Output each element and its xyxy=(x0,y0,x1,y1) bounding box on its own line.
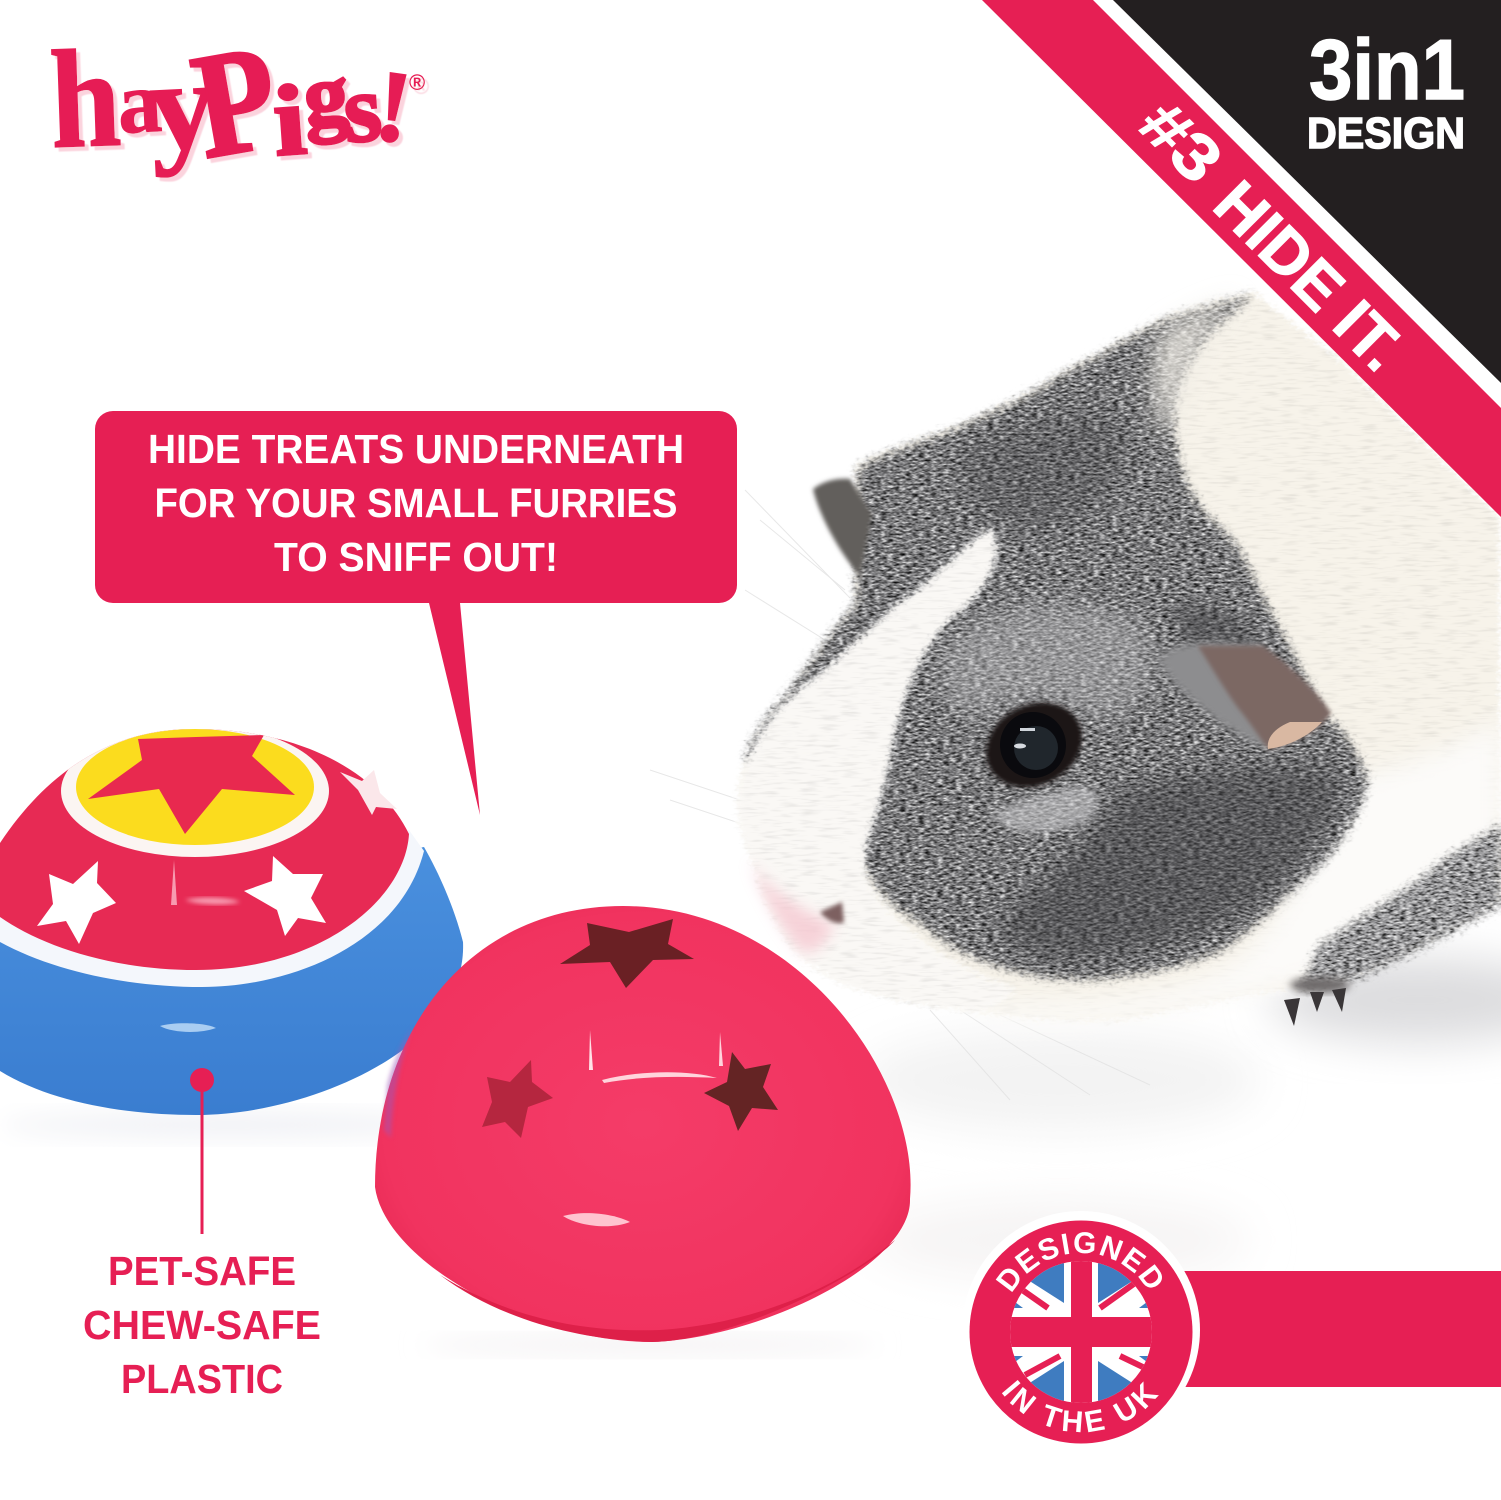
grey fur: crown and cheek xyxy=(745,295,1367,980)
corner banner: dark triangle xyxy=(1113,0,1501,383)
darker rim xyxy=(440,1240,895,1342)
diagonal band text: #3 hide it: HIDE IT. xyxy=(1200,167,1418,385)
label: pet-safe plastic: PLASTIC xyxy=(121,1356,283,1402)
badge: designed in the UK xyxy=(970,1215,1200,1444)
white blaze and muzzle xyxy=(737,528,1015,1012)
label: pet-safe plastic: CHEW-SAFE xyxy=(83,1302,321,1348)
whiskers xyxy=(650,490,1150,1100)
badge text: DESIGNED xyxy=(996,1232,1162,1292)
pink muzzle xyxy=(750,860,835,952)
white ring and yellow disc xyxy=(61,725,329,857)
logo: hayPigs!: g xyxy=(301,46,351,146)
red cap xyxy=(0,729,409,970)
banner label: 3in1 design: DESIGN xyxy=(1307,109,1465,158)
logo: hayPigs!: ® xyxy=(409,70,425,95)
badge text: IN THE UK xyxy=(1002,1380,1159,1432)
callout: hide treats: FOR YOUR SMALL FURRIES xyxy=(154,480,678,526)
dark patch above ear xyxy=(1170,604,1265,650)
logo: hayPigs!: P xyxy=(182,13,290,190)
red toy dome with star cut-outs xyxy=(375,906,911,1342)
bottom right pink bar xyxy=(1180,1271,1501,1387)
corner banner: pink diagonal band xyxy=(982,0,1501,517)
lighter fur around eye xyxy=(940,603,1154,720)
purple reflection xyxy=(384,1028,412,1138)
union flag xyxy=(1010,1261,1152,1403)
callout: hide treats xyxy=(95,411,737,815)
rear grey fur xyxy=(1300,825,1501,990)
logo: hayPigs!: ! xyxy=(369,49,418,166)
banner label: 3in1 design xyxy=(1307,23,1465,158)
logo: hayPigs!: i xyxy=(270,64,309,177)
logo: hayPigs!: a xyxy=(115,54,164,153)
top ear xyxy=(813,479,872,576)
star holes xyxy=(560,919,694,988)
guinea pig photo illustration xyxy=(650,290,1501,1100)
logo: hayPigs!: s xyxy=(340,54,385,163)
soft floor shadows xyxy=(0,958,1501,1353)
highlights xyxy=(160,1023,216,1032)
logo: hayPigs! xyxy=(48,13,425,190)
dark cheek patch xyxy=(1000,766,1340,961)
nose xyxy=(820,902,844,923)
label: pet-safe plastic: PET-SAFE xyxy=(108,1248,296,1294)
callout: hide treats: HIDE TREATS UNDERNEATH xyxy=(148,426,684,472)
red star xyxy=(88,735,295,834)
eye xyxy=(971,686,1097,804)
blue toy half-dome with stars xyxy=(0,725,463,1115)
logo: hayPigs!: h xyxy=(48,21,123,178)
white stars xyxy=(37,861,116,944)
lower white chest fur xyxy=(960,720,1501,1024)
lighter crown fade xyxy=(1153,296,1240,440)
callout: hide treats: TO SNIFF OUT! xyxy=(274,534,558,580)
pointer line and dot xyxy=(190,1068,214,1234)
logo: hayPigs!: y xyxy=(146,33,219,178)
diagonal band text: #3 hide it xyxy=(1126,87,1418,385)
white rim band xyxy=(0,830,424,987)
diagonal band text: #3 hide it: #3 xyxy=(1126,87,1236,197)
body xyxy=(737,290,1501,1023)
banner label: 3in1 design: 3in1 xyxy=(1309,23,1465,118)
badge text xyxy=(996,1232,1162,1432)
side ear xyxy=(1158,642,1331,750)
highlights xyxy=(563,1213,630,1226)
dark crown patch xyxy=(960,412,1125,530)
label: pet-safe plastic xyxy=(83,1248,321,1402)
paw claws xyxy=(1284,977,1350,1026)
blue base xyxy=(0,847,463,1115)
